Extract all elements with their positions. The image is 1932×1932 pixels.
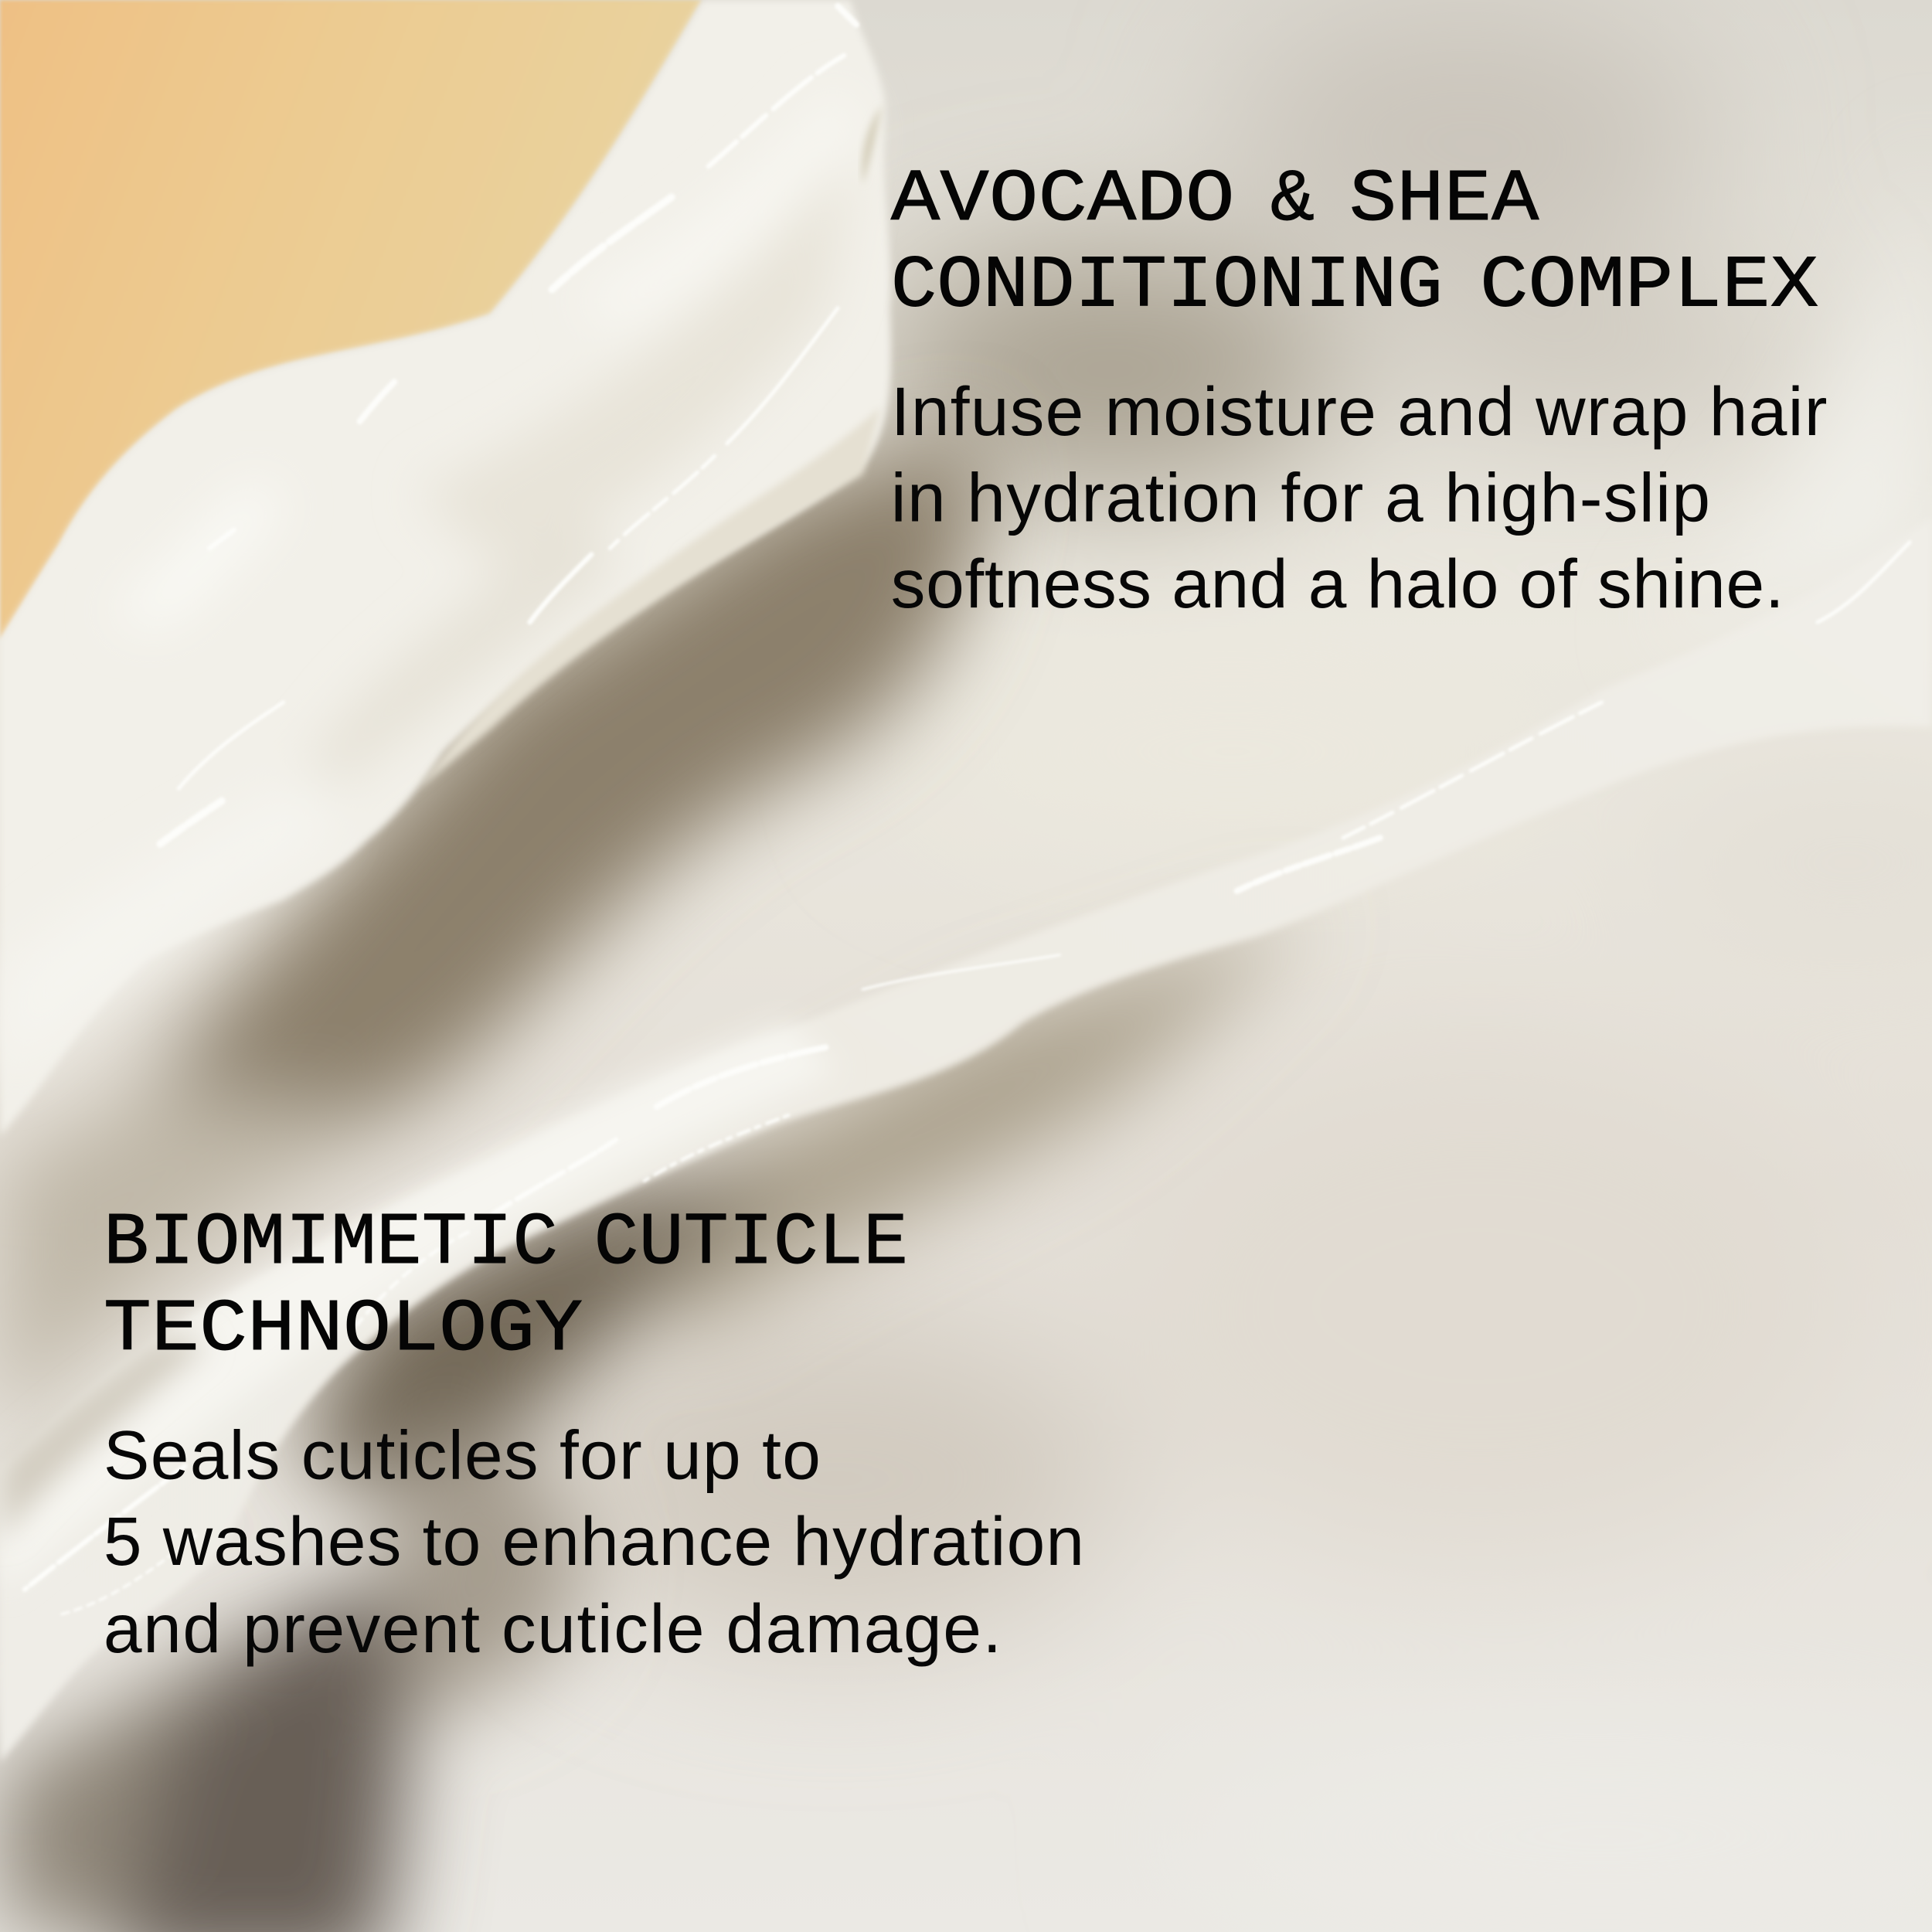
heading: avocado and shea: AVOCADO <box>891 158 1235 242</box>
right side bright fold <box>1651 135 1932 641</box>
body: avocado and shea: softness and a halo of shine. <box>891 545 1784 622</box>
heading: biomimetic cuticle: BIOMIMETIC <box>104 1201 558 1285</box>
heading: avocado and shea <box>891 158 1818 328</box>
body: biomimetic cuticle: 5 washes to enhance hydration <box>104 1502 1084 1580</box>
heading: avocado and shea: SHEA <box>1349 158 1539 242</box>
body: avocado and shea: in hydration for a high-slip <box>891 458 1710 536</box>
body: avocado and shea <box>891 372 1827 622</box>
text block: biomimetic cuticle <box>104 1201 1084 1667</box>
heading: avocado and shea: COMPLEX <box>1480 243 1818 328</box>
upper ribbon fold shadow <box>862 105 883 185</box>
heading: biomimetic cuticle: TECHNOLOGY <box>104 1287 583 1372</box>
body: biomimetic cuticle: and prevent cuticle damage. <box>104 1590 1002 1667</box>
body: biomimetic cuticle: Seals cuticles for up to <box>104 1416 821 1493</box>
heading: avocado and shea: CONDITIONING <box>891 243 1443 328</box>
heading: biomimetic cuticle: CUTICLE <box>594 1201 908 1285</box>
shadow valley under upper ribbon <box>0 431 978 1441</box>
body: avocado and shea: Infuse moisture and wrap hair <box>891 372 1827 450</box>
lower ribbon soft upper edge <box>0 1022 838 1590</box>
upper yellow backdrop <box>0 0 702 639</box>
heading: biomimetic cuticle <box>104 1201 908 1372</box>
shadows under lower ribbon <box>0 912 1318 1932</box>
heading: avocado and shea: & <box>1270 158 1315 242</box>
text block: avocado and shea <box>891 158 1827 622</box>
lower cream ribbon <box>0 518 1932 1762</box>
upper ribbon shading <box>0 87 862 1084</box>
upper cream ribbon <box>0 0 891 1136</box>
body: biomimetic cuticle <box>104 1416 1084 1667</box>
